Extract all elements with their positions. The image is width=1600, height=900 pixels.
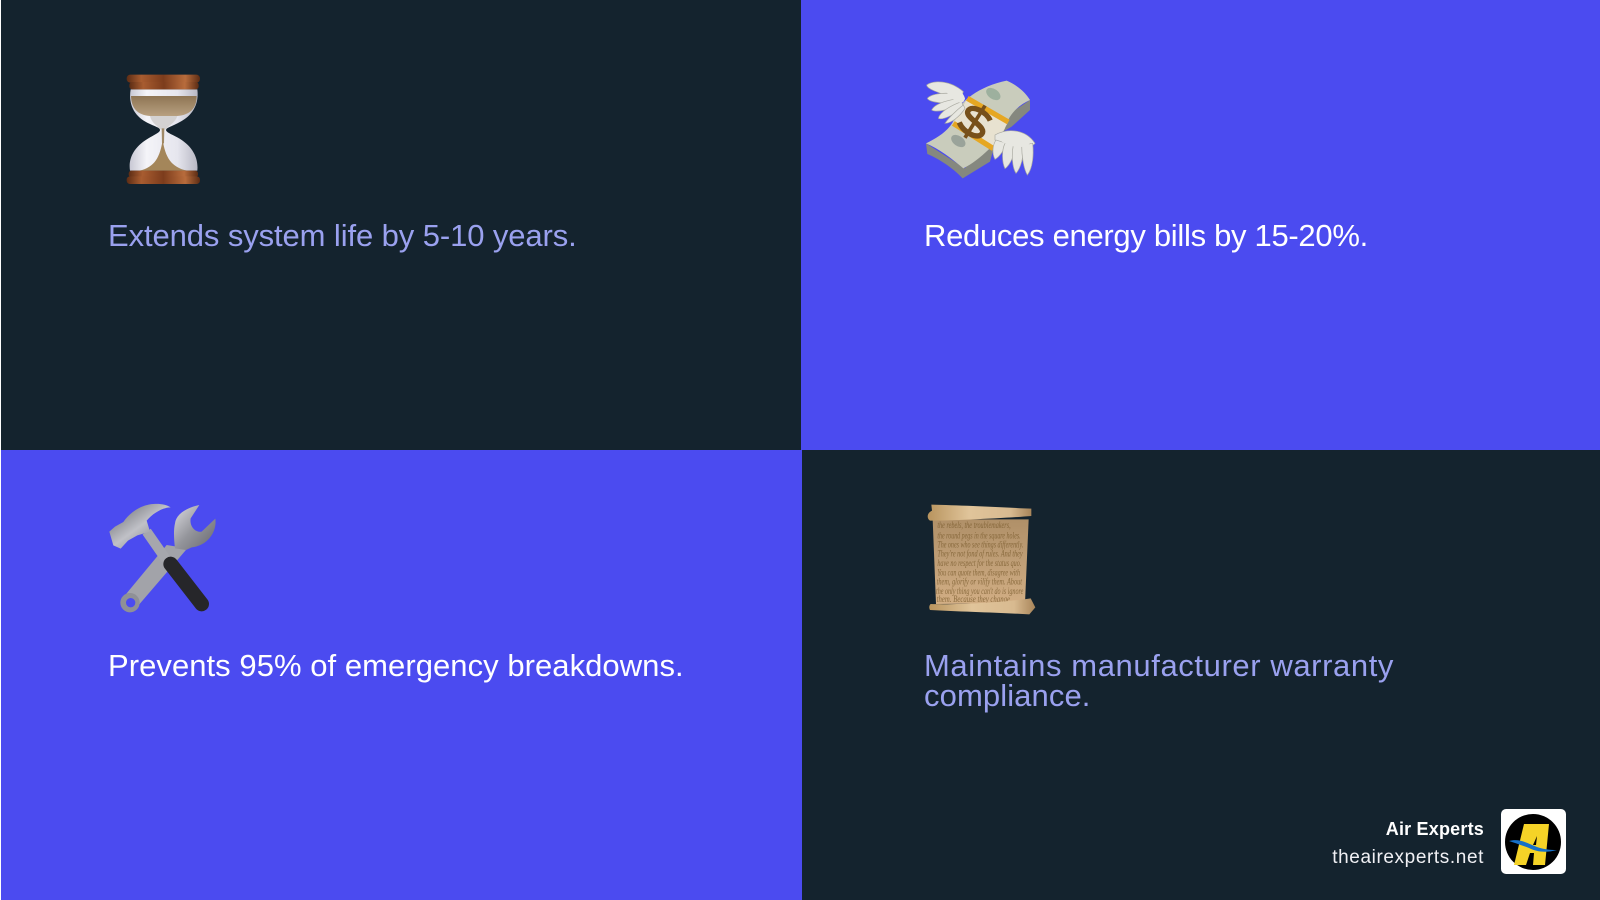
text: warranty compliance: Maintains manufacturer warranty [924, 648, 1394, 683]
icon: scroll: The ones who see things differently. [937, 539, 1023, 549]
icon: scroll: the only thing you can't do is ignore [936, 586, 1023, 596]
icon: scroll: have no respect for the status quo. [937, 558, 1021, 568]
icon: hammer and wrench [109, 504, 216, 612]
text: emergency breakdowns: Prevents 95% of emergency breakdowns. [108, 648, 684, 683]
text: system life: Extends system life by 5-10 years. [108, 218, 577, 253]
panel: warranty compliance [802, 450, 1600, 900]
text: energy bills: Reduces energy bills by 15-20%. [924, 218, 1368, 253]
icon: scroll: They're not fond of rules. And they [937, 549, 1023, 559]
panel: energy bills [801, 0, 1600, 450]
brand url: theairexperts.net [1332, 847, 1484, 868]
icon: scroll [928, 504, 1036, 614]
text: warranty compliance: compliance. [924, 678, 1091, 713]
logo [1501, 809, 1566, 874]
panel: emergency breakdowns [1, 450, 802, 900]
panel: system life [1, 0, 801, 450]
text: warranty compliance [924, 648, 1394, 713]
brand name: Air Experts [1386, 819, 1484, 839]
icon: scroll: them. Because they change [937, 594, 1010, 604]
icon: scroll: the rebels, the troublemakers, [937, 520, 1011, 530]
icon: money with wings [926, 80, 1036, 178]
icon: scroll: them, glorify or vilify them. About [937, 577, 1022, 587]
icon: hourglass [126, 74, 200, 184]
icon: scroll: You can quote them, disagree with [937, 567, 1020, 577]
branding: air experts [1332, 809, 1566, 874]
icon: scroll: the round pegs in the square holes. [937, 530, 1021, 540]
